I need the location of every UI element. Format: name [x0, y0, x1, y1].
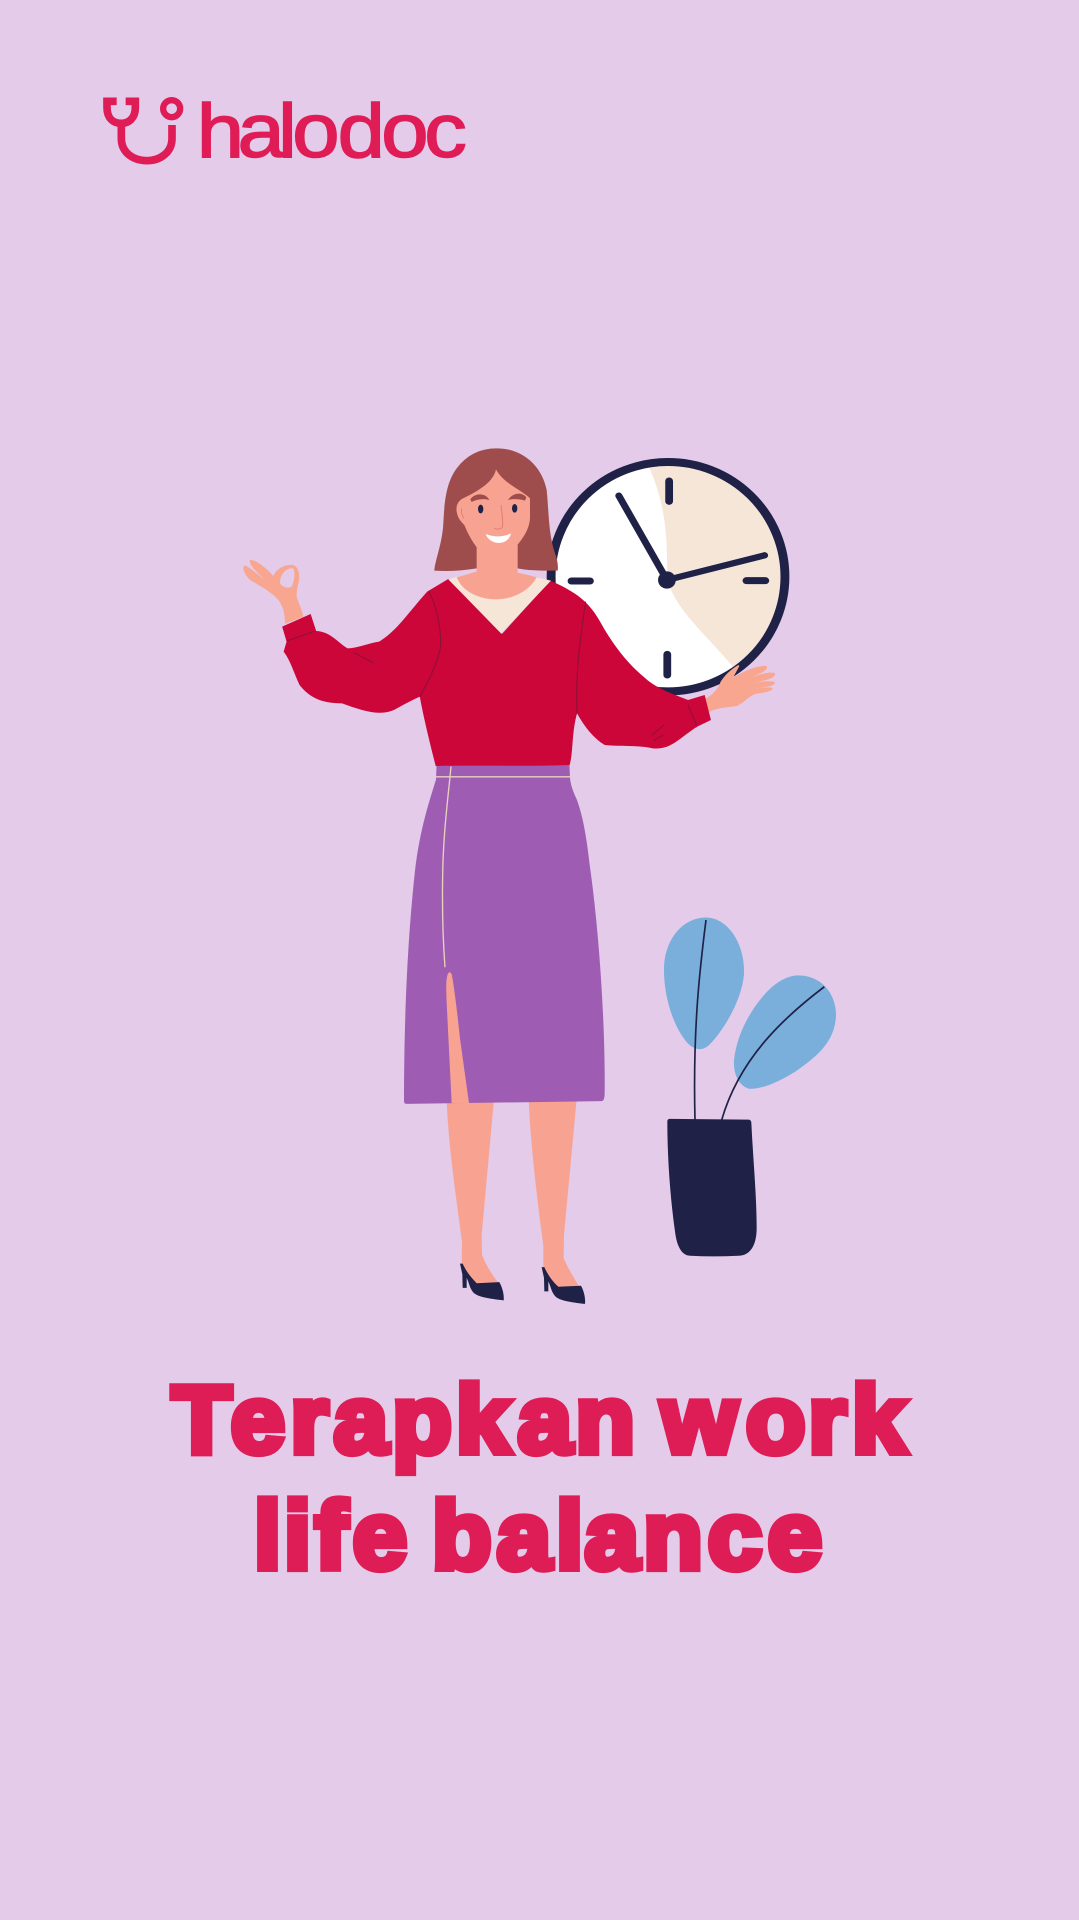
illustration: woman lower body: [404, 762, 605, 1304]
plant pot: [667, 1119, 757, 1256]
eyebrows: [470, 494, 526, 502]
logo: halodoc: [107, 89, 467, 174]
clock rim: [551, 462, 785, 691]
icon: left hand ok sign: [243, 560, 303, 624]
plant leaves: [664, 917, 836, 1089]
collar: [448, 577, 551, 633]
title line 2: life balance: [254, 1483, 822, 1589]
sweater fold lines: [287, 592, 697, 741]
skirt: [404, 762, 605, 1104]
logo wordmark: halodoc: [197, 89, 467, 174]
illustration: woman upper body: [282, 579, 711, 766]
title: [172, 1367, 906, 1589]
nose: [494, 505, 503, 529]
title line 1: Terapkan work: [172, 1367, 906, 1473]
face: [456, 469, 530, 556]
smile: [486, 533, 511, 543]
plant stems: [695, 920, 824, 1120]
ear line: [461, 508, 464, 518]
icon: stethoscope: [107, 100, 180, 161]
skirt seams: [436, 766, 570, 967]
shoes: [460, 1264, 585, 1304]
illustration: clock: [551, 462, 785, 691]
illustration: woman head: [434, 448, 558, 633]
clock shaded wedge: [647, 462, 781, 668]
sweater: [282, 579, 711, 766]
legs: [447, 1099, 580, 1289]
skirt slit: [446, 972, 469, 1103]
neck: [457, 540, 537, 599]
icon: right hand: [703, 665, 775, 713]
eyes: [478, 504, 517, 513]
clock ticks: [571, 481, 765, 675]
illustration: plant: [664, 917, 836, 1256]
hair: [434, 448, 558, 571]
clock hands: [619, 496, 765, 589]
